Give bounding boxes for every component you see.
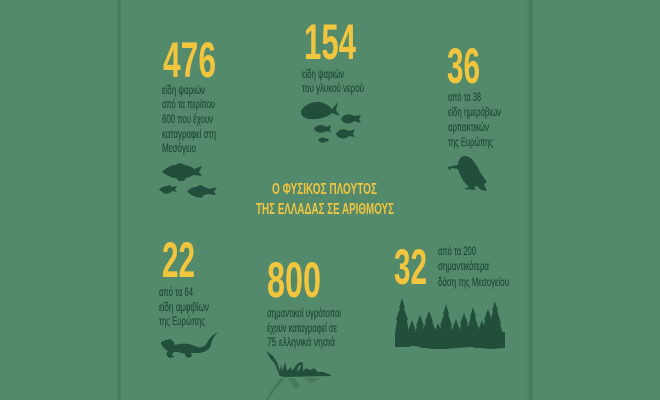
panel: 36 raptors xyxy=(447,38,501,191)
title: Ο ΦΥΣΙΚΟΣ ΠΛΟΥΤΟΣ xyxy=(272,181,377,198)
panel: 476 sea fish: καταγραφεί στη xyxy=(162,127,216,141)
icon: salamander xyxy=(161,332,218,358)
panel: 36 raptors: αρπακτικών xyxy=(448,120,489,134)
panel: 154 freshwater fish: του γλυκού νερού xyxy=(302,81,364,95)
panel: 22 amphibians: της Ευρώπης xyxy=(159,314,205,328)
panel: 476 sea fish xyxy=(159,32,217,198)
panel: 154 freshwater fish xyxy=(301,14,364,143)
panel: 22 amphibians: 22 xyxy=(162,232,195,288)
panel: 800 wetlands: 800 xyxy=(267,252,321,308)
panel: 800 wetlands: 75 ελληνικά νησιά xyxy=(267,335,335,349)
panel: 32 forests: δάση της Μεσογείου xyxy=(438,275,509,289)
panel: 476 sea fish: είδη ψαριών xyxy=(162,83,205,97)
title: ΤΗΣ ΕΛΛΑΔΑΣ ΣΕ ΑΡΙΘΜΟΥΣ xyxy=(256,201,394,218)
panel: 800 wetlands: σημαντικοί υγρότοποι xyxy=(267,306,341,320)
icon: wetland reeds xyxy=(266,351,331,400)
panel: 36 raptors: 36 xyxy=(447,38,480,94)
panel: 476 sea fish: 600 που έχουν xyxy=(162,112,213,126)
panel: 32 forests: 32 xyxy=(394,239,427,295)
panel: 154 freshwater fish: είδη ψαριών xyxy=(302,67,344,81)
icon: forest xyxy=(395,298,505,349)
title xyxy=(256,181,394,218)
panel: 476 sea fish: από τα περίπου xyxy=(162,97,215,111)
panel: 154 freshwater fish: 154 xyxy=(304,14,356,70)
panel: 36 raptors: είδη ημερόβιων xyxy=(448,105,501,119)
panel: 476 sea fish: 476 xyxy=(163,32,216,88)
panel: 800 wetlands: έχουν καταγραφεί σε xyxy=(267,321,337,335)
panel: 36 raptors: της Ευρώπης xyxy=(448,135,493,149)
panel: 800 wetlands xyxy=(266,252,341,400)
icon: five freshwater fish xyxy=(301,102,361,143)
panel: 32 forests: από τα 200 xyxy=(438,244,476,258)
panel: 22 amphibians: είδη αμφιβίων xyxy=(159,300,209,314)
panel: 32 forests xyxy=(394,239,509,349)
icon: three sea fish xyxy=(159,163,217,198)
panel: 476 sea fish: Μεσόγειο xyxy=(162,141,196,155)
panel: 36 raptors: από τα 38 xyxy=(448,90,481,104)
panel: 22 amphibians xyxy=(159,232,218,358)
icon: vulture xyxy=(448,156,487,191)
panel: 32 forests: σημαντικότερα xyxy=(438,259,489,273)
panel: 22 amphibians: από τα 64 xyxy=(159,285,193,299)
